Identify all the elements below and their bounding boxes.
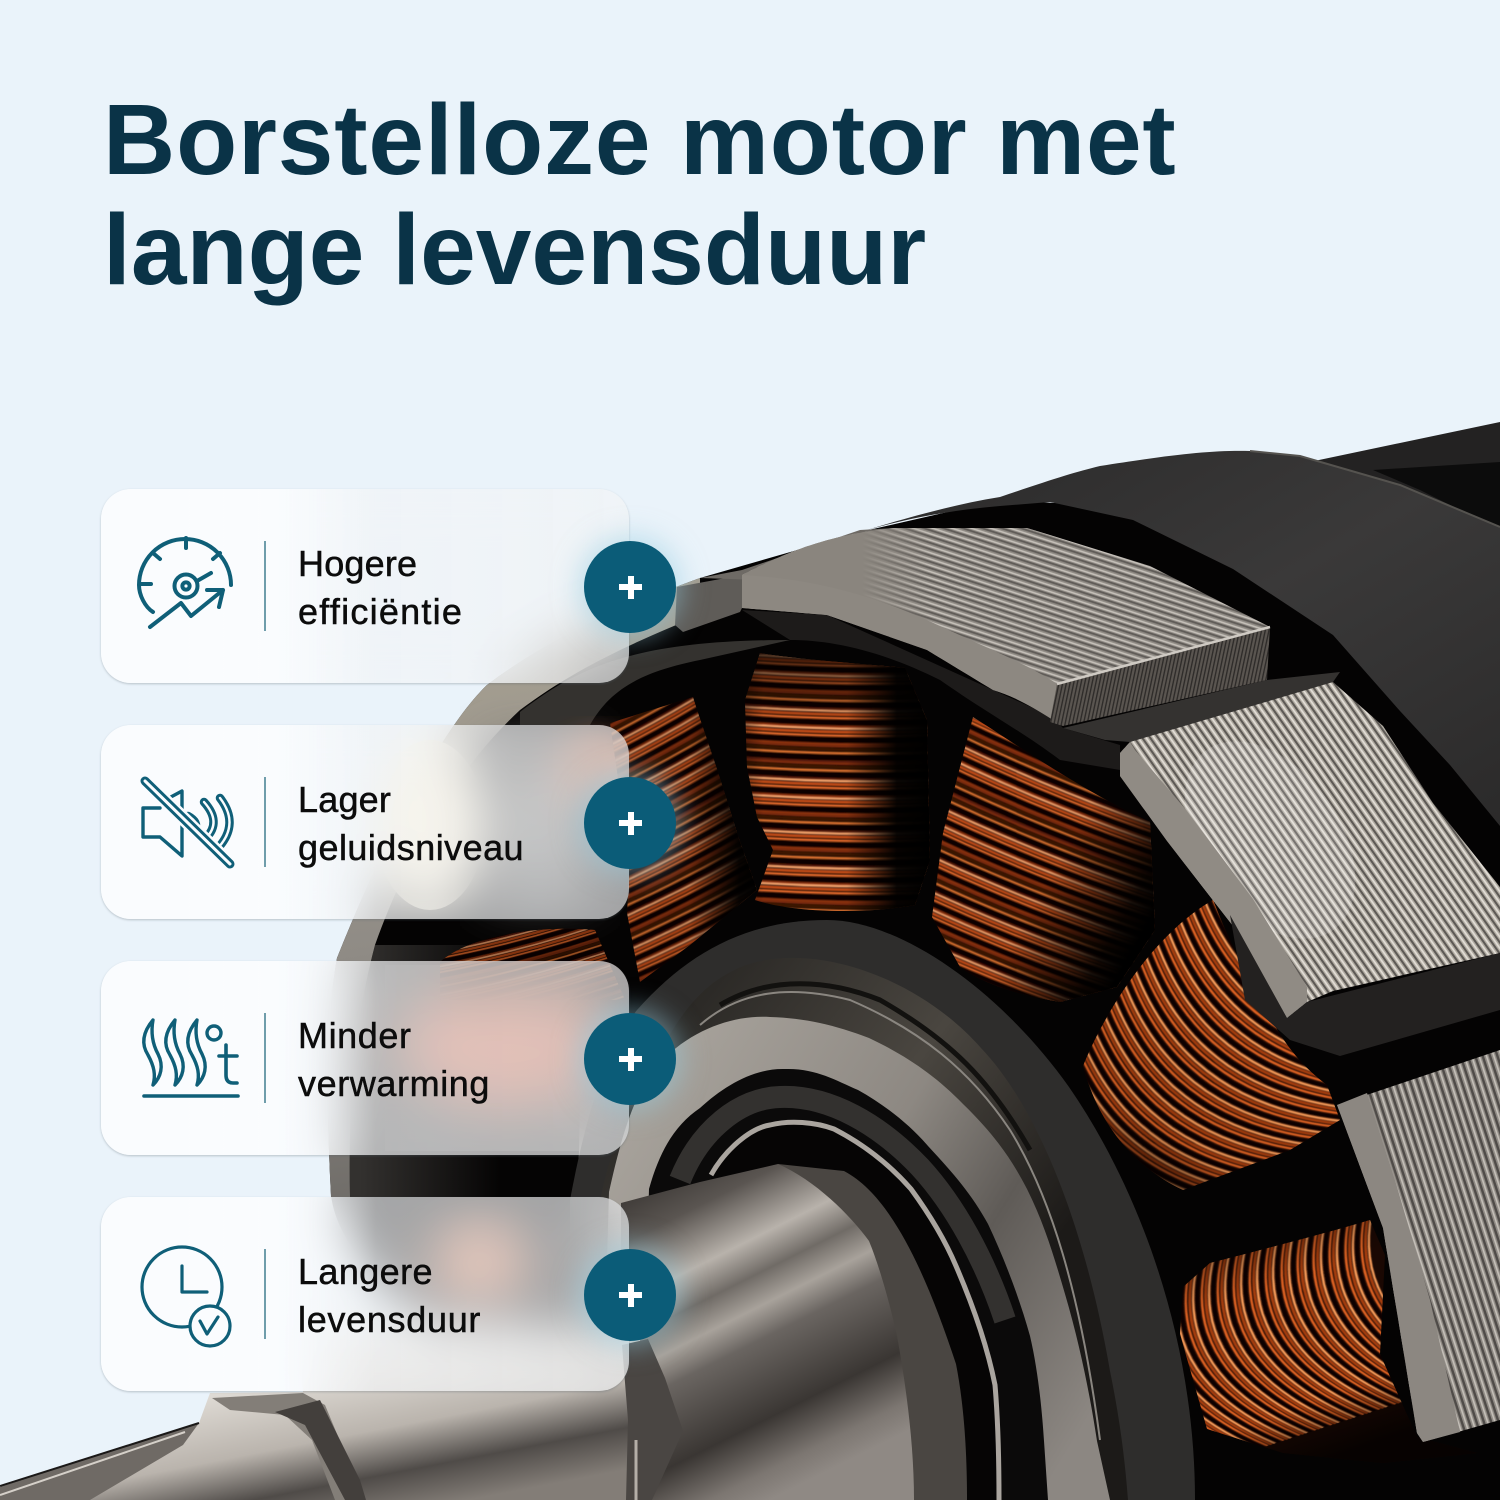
- label: minder verwarming: [298, 1015, 490, 1104]
- pole 2: [1120, 682, 1500, 1018]
- illustration: brushless motor: [0, 422, 1500, 1500]
- copper coil C: [932, 717, 1155, 1002]
- icon: muted speaker: [140, 776, 234, 868]
- housing band: [860, 451, 1500, 826]
- label: lager geluidsniveau: Lager: [298, 779, 391, 820]
- pole 1: [742, 528, 1270, 770]
- button: plus 3: [584, 1013, 676, 1105]
- shaft neck: [0, 1330, 683, 1500]
- label: hogere efficiëntie: [298, 543, 463, 632]
- divider: [264, 777, 266, 867]
- label: hogere efficiëntie: Hogere: [298, 543, 417, 584]
- title: [103, 84, 1177, 306]
- pole 3: [1337, 1050, 1500, 1442]
- label: minder verwarming: verwarming: [298, 1063, 490, 1104]
- icon: heat waves and temperature: [142, 1018, 240, 1098]
- label: lager geluidsniveau: geluidsniveau: [298, 827, 524, 868]
- label: hogere efficiëntie: efficiëntie: [298, 591, 463, 632]
- shaft shoulder: [778, 1164, 967, 1500]
- stator body silhouette: [328, 500, 1500, 1500]
- copper glow behind cards: [400, 740, 640, 1298]
- copper coil D: [1083, 900, 1340, 1190]
- copper coil B: [745, 653, 930, 911]
- button: plus 4: [584, 1249, 676, 1341]
- divider: [264, 541, 266, 631]
- divider: [264, 1013, 266, 1103]
- pole joint strip: [1063, 672, 1340, 742]
- title: lange levensduur: [103, 194, 926, 306]
- button: plus 2: [584, 777, 676, 869]
- hub bright ring: [600, 1017, 1110, 1500]
- card: lager geluidsniveau: [101, 725, 629, 919]
- card: minder verwarming: [101, 961, 629, 1155]
- divider: [264, 1249, 266, 1339]
- label: lager geluidsniveau: [298, 779, 524, 868]
- left pole piece: [675, 575, 742, 632]
- rear shaft end: [1300, 422, 1500, 560]
- label: langere levensduur: [298, 1251, 481, 1340]
- label: langere levensduur: Langere: [298, 1251, 433, 1292]
- left stator ring: [328, 578, 790, 1200]
- dark notch below pole 2: [1230, 915, 1500, 1056]
- icon: clock with check: [140, 1245, 232, 1348]
- bearing silver rim: [700, 1122, 999, 1500]
- button: plus 1: [584, 541, 676, 633]
- card: hogere efficiëntie: [101, 489, 629, 683]
- icon: gauge with rising arrow: [137, 536, 233, 630]
- label: minder verwarming: Minder: [298, 1015, 412, 1056]
- copper coil E: [1180, 1220, 1406, 1454]
- label: langere levensduur: levensduur: [298, 1299, 481, 1340]
- upper shoulder strip: [700, 528, 895, 580]
- hub grooves: [600, 958, 1128, 1500]
- card: langere levensduur: [101, 1197, 629, 1391]
- main shaft cylinder: [620, 1164, 914, 1500]
- bearing seal: [640, 1069, 1048, 1500]
- hub black outer ring: [570, 920, 1195, 1500]
- copper coil: hidden left: [440, 928, 624, 1000]
- copper coil A: [610, 697, 757, 982]
- title: Borstelloze motor met: [103, 84, 1177, 196]
